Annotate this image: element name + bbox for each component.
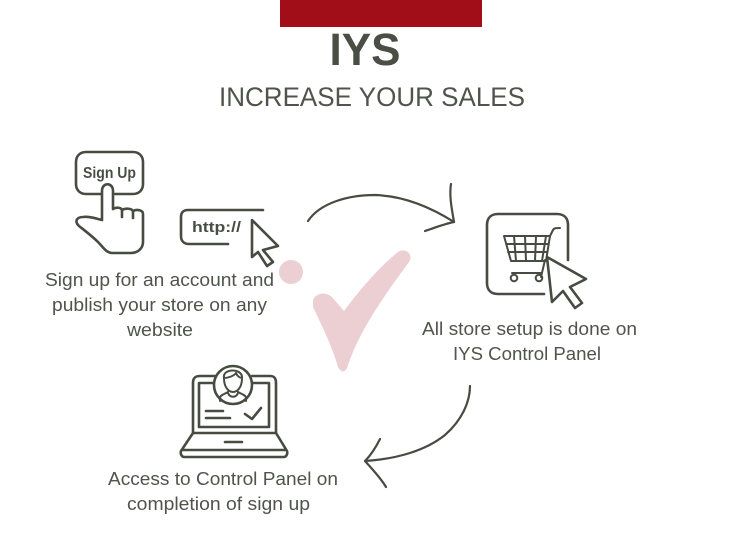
arrow: to store setup — [308, 184, 454, 231]
top red bar — [280, 0, 482, 27]
title: IYS — [330, 24, 400, 75]
icon: http address bar with cursor — [181, 210, 278, 266]
step 2 text: IYS Control Panel — [453, 344, 601, 364]
step 3 text: completion of sign up — [127, 494, 310, 514]
step 2 text: All store setup is done on — [422, 319, 637, 339]
step 3 text: Access to Control Panel on — [108, 469, 338, 489]
step 2 text — [422, 319, 637, 364]
step 1 text: Sign up for an account and — [45, 270, 274, 290]
arrow: to control panel — [365, 386, 470, 487]
step 1 text: publish your store on any — [52, 295, 267, 315]
icon: sign up button with hand: Sign Up — [83, 165, 136, 182]
subtitle: INCREASE YOUR SALES — [219, 82, 525, 112]
step 3 text — [108, 469, 338, 514]
step 1 text — [45, 270, 274, 340]
icon: shopping cart with cursor — [487, 214, 586, 308]
icon: laptop with user avatar — [181, 366, 287, 457]
icon: sign up button with hand — [76, 152, 143, 253]
icon: http address bar with cursor: http:// — [192, 220, 241, 236]
background check mark — [279, 250, 410, 371]
step 1 text: website — [126, 320, 193, 340]
